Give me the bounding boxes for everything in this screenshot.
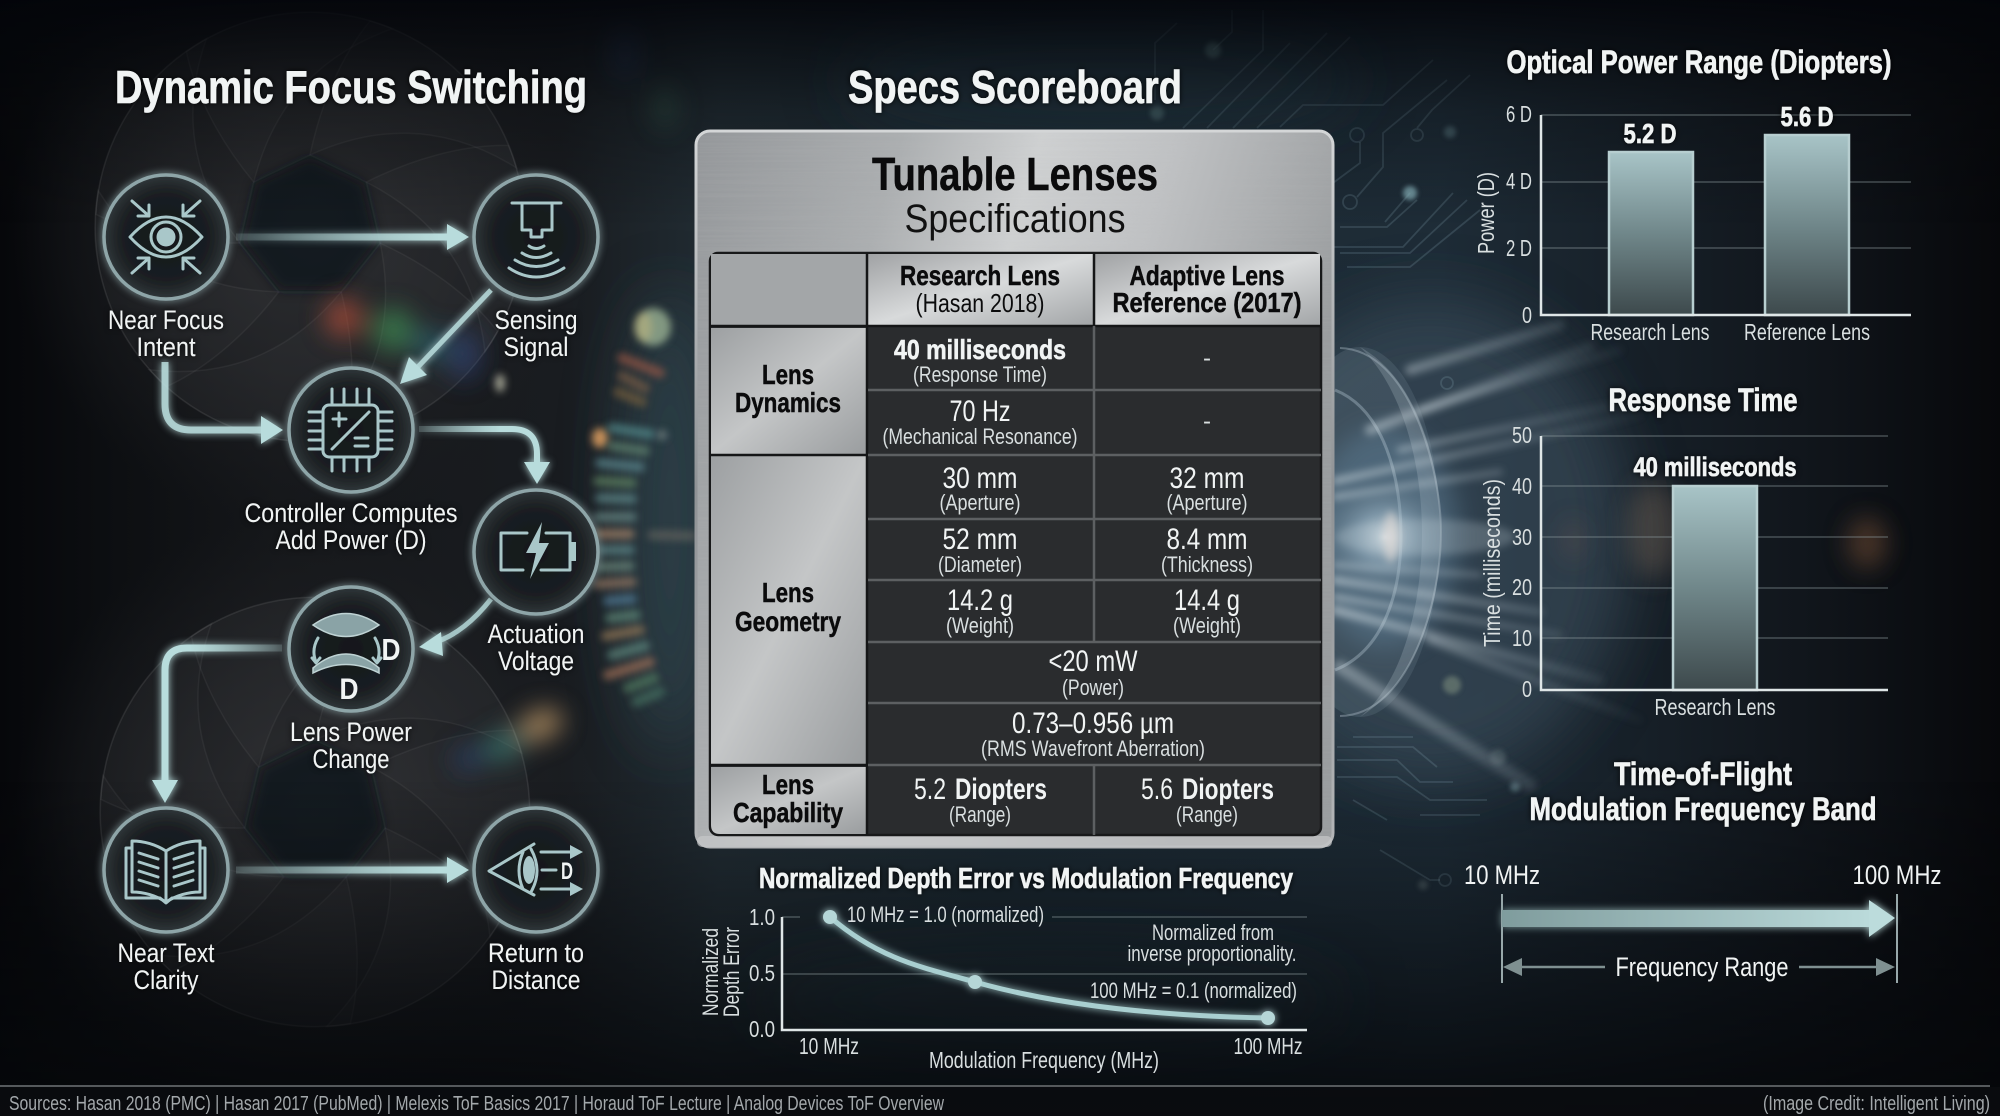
cell: mechanical resonance: 70 Hz	[950, 395, 1010, 428]
icon: lens elements	[312, 614, 381, 673]
label: Signal	[504, 332, 568, 362]
cell: range reference	[1141, 773, 1274, 827]
axis title: frequency: Modulation Frequency (MHz)	[929, 1047, 1159, 1073]
range arrow left	[1503, 958, 1605, 976]
y ticks: 10	[1512, 625, 1532, 651]
bokeh dots	[495, 308, 671, 448]
arrow: frequency band	[1502, 900, 1895, 937]
cell: response time: 40 milliseconds	[894, 334, 1066, 365]
cell: thickness: 8.4 mm	[1166, 523, 1248, 556]
chart title: Optical Power Range (Diopters)	[1506, 44, 1892, 80]
label: Near Focus	[108, 305, 224, 335]
chart: modulation frequency band	[1464, 756, 1942, 983]
cell: range research: 5.2	[914, 773, 946, 806]
label	[488, 619, 584, 676]
label	[244, 498, 458, 555]
icon: open book	[126, 841, 205, 903]
column header: Research Lens	[900, 260, 1060, 318]
cell: aperture reference: (Aperture)	[1166, 490, 1248, 515]
tick labels: 0.0	[749, 1016, 775, 1042]
icon: sensor with waves	[509, 203, 564, 277]
row label: Lens Dynamics: Dynamics	[735, 387, 841, 418]
value: 5.6 D: 5.6 D	[1780, 101, 1834, 132]
node: near focus intent	[104, 175, 228, 362]
node: sensing signal	[474, 175, 598, 362]
label: frequency range: Frequency Range	[1616, 952, 1788, 982]
label: Change	[312, 744, 390, 774]
label: Distance	[492, 965, 580, 995]
column header: Adaptive Lens Reference	[1112, 260, 1302, 318]
lens and light rays	[1280, 325, 1640, 785]
chart title	[1530, 756, 1876, 827]
cell: diameter: 52 mm	[942, 523, 1018, 556]
y ticks: 30	[1512, 524, 1532, 550]
label: Intent	[136, 332, 196, 362]
cell: power: <20 mW	[1048, 645, 1138, 678]
row label: Lens Capability	[733, 769, 843, 828]
cell: range research: (Range)	[949, 802, 1011, 827]
cell: thickness	[1161, 523, 1253, 577]
value: 40 milliseconds: 40 milliseconds	[1634, 452, 1796, 482]
heading: Specifications: Specifications	[904, 197, 1126, 241]
rainbow streaks	[598, 358, 692, 702]
cell: wavefront aberration	[981, 707, 1205, 761]
row label: Lens Capability: Lens	[762, 769, 814, 800]
label	[108, 305, 224, 362]
cell: power	[1048, 645, 1138, 700]
axis title: Time (milliseconds)	[1479, 479, 1505, 647]
cell: range reference: 5.6	[1141, 773, 1173, 806]
label	[290, 717, 412, 774]
label: 10 MHz: 10 MHz	[1464, 860, 1540, 890]
label: Add Power (D)	[276, 525, 426, 555]
cell: range reference: Diopters	[1182, 773, 1274, 806]
y ticks: 0	[1522, 676, 1532, 702]
bar: research lens	[1609, 152, 1693, 315]
tick labels: 100 MHz	[1234, 1033, 1302, 1059]
cell: range research: Diopters	[955, 773, 1047, 806]
cell: aperture research	[940, 462, 1020, 515]
icon: battery with bolt	[501, 522, 576, 579]
y ticks: 6 D	[1506, 101, 1532, 127]
chart title: Time-of-Flight	[1614, 756, 1792, 792]
cell: aperture research: 30 mm	[942, 462, 1018, 495]
label: Voltage	[498, 646, 574, 676]
arrow: near text to distance	[236, 857, 469, 883]
y ticks: 4 D	[1506, 168, 1532, 194]
annotation: 10 MHz: 10 MHz = 1.0 (normalized)	[847, 902, 1044, 927]
label: Return to	[488, 938, 584, 968]
node: actuation voltage	[474, 490, 598, 676]
node: controller computes	[244, 368, 458, 555]
chart title: Normalized Depth Error vs Modulation Frequency	[759, 863, 1293, 895]
column header: Adaptive Lens Reference: Reference (2017)	[1112, 287, 1302, 318]
cell: weight research	[946, 584, 1014, 638]
chart title: Modulation Frequency Band	[1530, 791, 1876, 827]
heading: Tunable Lenses: Tunable Lenses	[872, 148, 1158, 200]
label: Lens Power	[290, 717, 412, 747]
chart title: Response Time	[1608, 382, 1798, 418]
y ticks	[1506, 101, 1532, 328]
cell: response time	[894, 334, 1066, 387]
chart: response time	[1479, 382, 1888, 720]
row label: Lens Geometry	[735, 577, 841, 637]
tick labels: 10 MHz	[799, 1033, 859, 1059]
cell: weight research: (Weight)	[946, 613, 1014, 638]
arrow: sensing to controller	[400, 290, 491, 384]
annotation: 100 MHz: 100 MHz = 0.1 (normalized)	[1090, 978, 1297, 1003]
label: Near Text	[118, 938, 215, 968]
tick labels	[749, 904, 1302, 1059]
cell: diameter	[938, 523, 1022, 577]
axis title: normalized depth error	[698, 927, 744, 1017]
curve with points	[823, 910, 1275, 1025]
y ticks	[1512, 422, 1532, 702]
y ticks: 2 D	[1506, 235, 1532, 261]
rainbow flares	[324, 24, 679, 778]
circuit glow dots	[1150, 42, 1520, 890]
axis title: normalized depth error: Depth Error	[719, 927, 744, 1017]
cell: mechanical resonance	[882, 395, 1078, 449]
arrow: controller to actuation	[419, 429, 550, 484]
category: reference lens: Reference Lens	[1744, 319, 1870, 345]
panel: focus switching flow	[104, 175, 598, 995]
cell: weight reference	[1173, 584, 1241, 638]
cell: aperture reference	[1166, 462, 1248, 515]
cell: power: (Power)	[1062, 675, 1124, 700]
cell: weight reference: 14.4 g	[1174, 584, 1240, 617]
node: lens power change	[289, 587, 413, 774]
cell: response time: (Response Time)	[913, 362, 1047, 387]
label	[494, 305, 578, 362]
y ticks: 40	[1512, 473, 1532, 499]
y ticks: 0	[1522, 302, 1532, 328]
cell: dash two: -	[1203, 408, 1211, 435]
annotation: normalized from: inverse proportionality.	[1128, 941, 1296, 966]
footer	[0, 1086, 1990, 1115]
axis title: normalized depth error: Normalized	[698, 928, 723, 1016]
row label: Lens Dynamics: Lens	[762, 359, 814, 390]
label: Actuation	[488, 619, 584, 649]
column header: Research Lens: Research Lens	[900, 260, 1060, 291]
letter D below: D	[340, 673, 358, 706]
chart: optical power range	[1473, 44, 1911, 345]
cell: aperture research: (Aperture)	[940, 490, 1020, 515]
y ticks: 50	[1512, 422, 1532, 448]
circuit traces	[1155, 10, 1487, 886]
category: research lens: Research Lens	[1654, 694, 1776, 720]
title: Specs Scoreboard: Specs Scoreboard	[848, 61, 1182, 113]
cell: aperture reference: 32 mm	[1170, 462, 1244, 495]
category: research lens: Research Lens	[1590, 319, 1710, 345]
row label: Lens Geometry: Lens	[762, 577, 814, 608]
arrow: near focus to controller	[165, 362, 283, 444]
icon: processor chip	[309, 389, 392, 471]
cell: wavefront aberration: 0.73–0.956 µm	[1012, 707, 1174, 740]
node: near text clarity	[104, 808, 228, 995]
table values	[882, 334, 1274, 827]
row label: Lens Geometry: Geometry	[735, 606, 841, 637]
label: Sensing	[494, 305, 578, 335]
cell: dash: -	[1203, 345, 1211, 372]
title: Dynamic Focus Switching: Dynamic Focus Switching	[115, 61, 587, 113]
label: Controller Computes	[244, 498, 458, 528]
cell: mechanical resonance: (Mechanical Resonance)	[882, 424, 1078, 449]
annotation: normalized from	[1128, 920, 1296, 966]
annotation: normalized from: Normalized from	[1152, 920, 1274, 945]
arrow: actuation to lens power	[419, 599, 491, 656]
row label: Lens Capability: Capability	[733, 797, 843, 828]
cell: weight research: 14.2 g	[947, 584, 1013, 617]
icon: eye with converging arrows	[130, 201, 202, 273]
bar: research lens	[1673, 486, 1757, 690]
icon: side eye with arrows: D	[561, 858, 573, 885]
panel: specs table plate	[696, 131, 1333, 847]
label	[118, 938, 215, 995]
label: Clarity	[134, 965, 199, 995]
axis title: Power (D)	[1473, 172, 1499, 254]
arrow: lens power to near text	[152, 648, 282, 803]
tick labels: 1.0	[749, 904, 775, 930]
cell: diameter: (Diameter)	[938, 552, 1022, 577]
column header: Adaptive Lens Reference: Adaptive Lens	[1130, 260, 1284, 291]
cell: thickness: (Thickness)	[1161, 552, 1253, 577]
y ticks: 20	[1512, 574, 1532, 600]
column header: Research Lens: (Hasan 2018)	[916, 288, 1044, 318]
arrow: near focus to sensing	[236, 224, 469, 250]
bar: reference lens	[1765, 135, 1849, 315]
icon: side eye with arrows	[489, 844, 583, 896]
table grid	[710, 253, 1321, 835]
sources: Sources: Hasan 2018 (PMC) | Hasan 2017 (PubMed) | Melexis ToF Basics 2017 | Horaud ToF Lecture | Analog Devices ToF Overview	[9, 1093, 944, 1115]
cell: wavefront aberration: (RMS Wavefront Aberration)	[981, 736, 1205, 761]
range arrow right	[1799, 958, 1895, 976]
cell: range reference: (Range)	[1176, 802, 1238, 827]
row label: Lens Dynamics	[735, 359, 841, 418]
chart: normalized depth error	[698, 863, 1307, 1073]
node: return to distance	[474, 808, 598, 995]
tick labels: 0.5	[749, 960, 775, 986]
cell: range research	[914, 773, 1047, 827]
value: 5.2 D: 5.2 D	[1624, 118, 1676, 149]
label	[488, 938, 584, 995]
letter D right: D	[382, 632, 400, 667]
label: 100 MHz: 100 MHz	[1852, 860, 1942, 890]
cell: weight reference: (Weight)	[1173, 613, 1241, 638]
